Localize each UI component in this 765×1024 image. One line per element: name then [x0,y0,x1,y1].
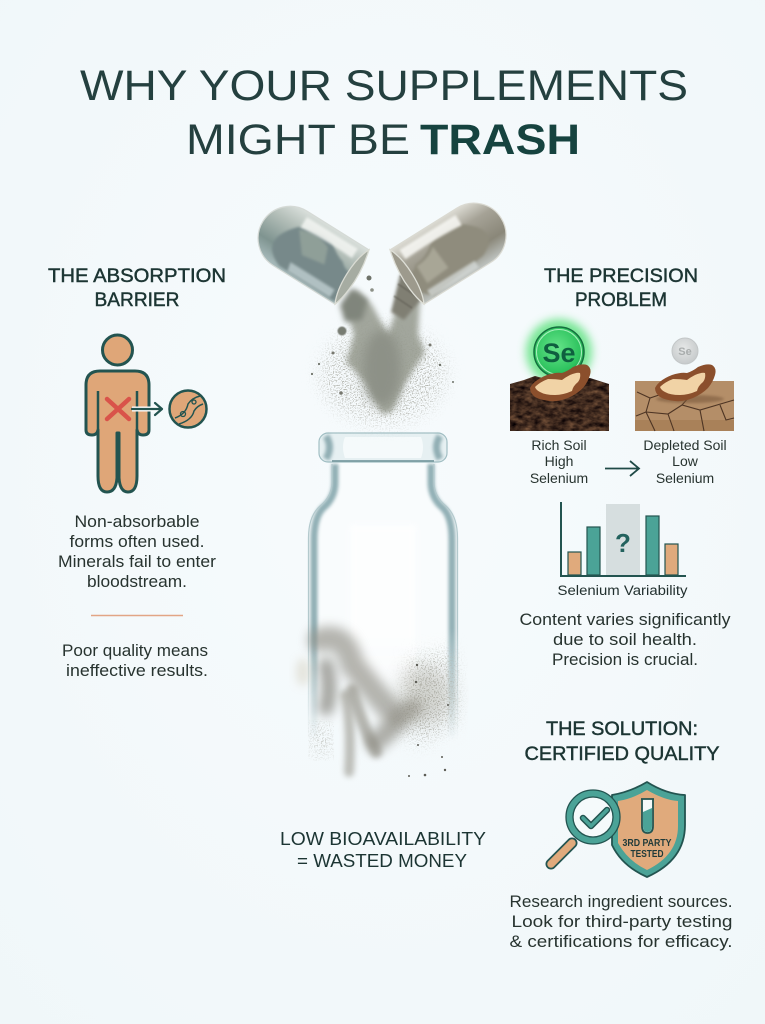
text: absorption explanation: Minerals fail to enter [58,552,216,571]
text: solution explanation: Look for third-party testing [512,912,732,931]
glass bottle [308,432,458,731]
title: TRASH [420,116,580,164]
panel: the absorption barrier [48,266,226,680]
panel: the precision problem [510,266,734,669]
powder plume [311,270,454,423]
icon: magnifier and certified shield [551,782,685,877]
heading: the absorption barrier [48,266,226,311]
title [80,62,688,164]
labels: rich soil: Selenium [530,470,588,486]
central illustration: capsules, powder and bottle [258,202,507,780]
callout: low bioavailability: LOW BIOAVAILABILITY [280,829,486,849]
callout: low bioavailability: = WASTED MONEY [297,851,467,871]
labels: depleted soil: Low [672,453,699,469]
text: solution explanation: Research ingredient sources. [510,892,732,911]
text: quality note [62,641,208,680]
callout: low bioavailability [280,829,486,871]
icon: person with blocked absorption [86,335,206,492]
text: quality note: ineffective results. [66,661,208,680]
text: precision explanation: due to soil health. [553,630,697,649]
arrow: rich to depleted [605,461,639,476]
text: quality note: Poor quality means [62,641,208,660]
bar chart: selenium variability: Selenium Variability [558,583,688,598]
illustration: depleted soil with faded selenium [635,338,734,431]
icon: magnifier and certified shield: TESTED [630,849,664,860]
heading: the absorption barrier: BARRIER [94,290,180,311]
icon: magnifier and certified shield: 3RD PARTY [622,838,672,849]
labels: depleted soil: Selenium [656,470,714,486]
bar chart: selenium variability: ? [615,528,631,558]
text: precision explanation [520,610,731,669]
text: absorption explanation: Non-absorbable [74,512,200,531]
text: absorption explanation [58,512,216,591]
labels: depleted soil: Depleted Soil [643,437,727,453]
text: precision explanation: Precision is crucial. [552,650,698,669]
illustration: depleted soil with faded selenium: Se [678,346,692,358]
labels: depleted soil [643,437,727,486]
labels: rich soil: High [545,453,573,469]
text: solution explanation: & certifications for efficacy. [510,932,732,951]
heading: the solution: CERTIFIED QUALITY [524,744,720,765]
heading: the precision problem: THE PRECISION [544,266,698,287]
heading: the solution: THE SOLUTION: [546,719,698,740]
illustration: rich soil with selenium [510,319,609,431]
left capsule half [246,194,373,307]
heading: the solution [524,719,720,765]
illustration: rich soil with selenium: Se [542,338,576,368]
text: absorption explanation: bloodstream. [87,572,187,591]
labels: rich soil [530,437,588,486]
right capsule half [386,191,518,307]
text: solution explanation [510,892,732,951]
text: absorption explanation: forms often used. [70,532,204,551]
powder settling at bottle bottom [296,638,456,777]
title: WHY YOUR SUPPLEMENTS [80,62,688,110]
labels: rich soil: Rich Soil [531,437,587,453]
heading: the precision problem [544,266,698,311]
heading: the absorption barrier: THE ABSORPTION [48,266,226,287]
heading: the precision problem: PROBLEM [575,290,667,311]
text: precision explanation: Content varies significantly [520,610,731,629]
title: MIGHT BE [186,116,410,164]
panel: the solution [510,719,732,951]
bar chart: selenium variability [558,502,688,598]
